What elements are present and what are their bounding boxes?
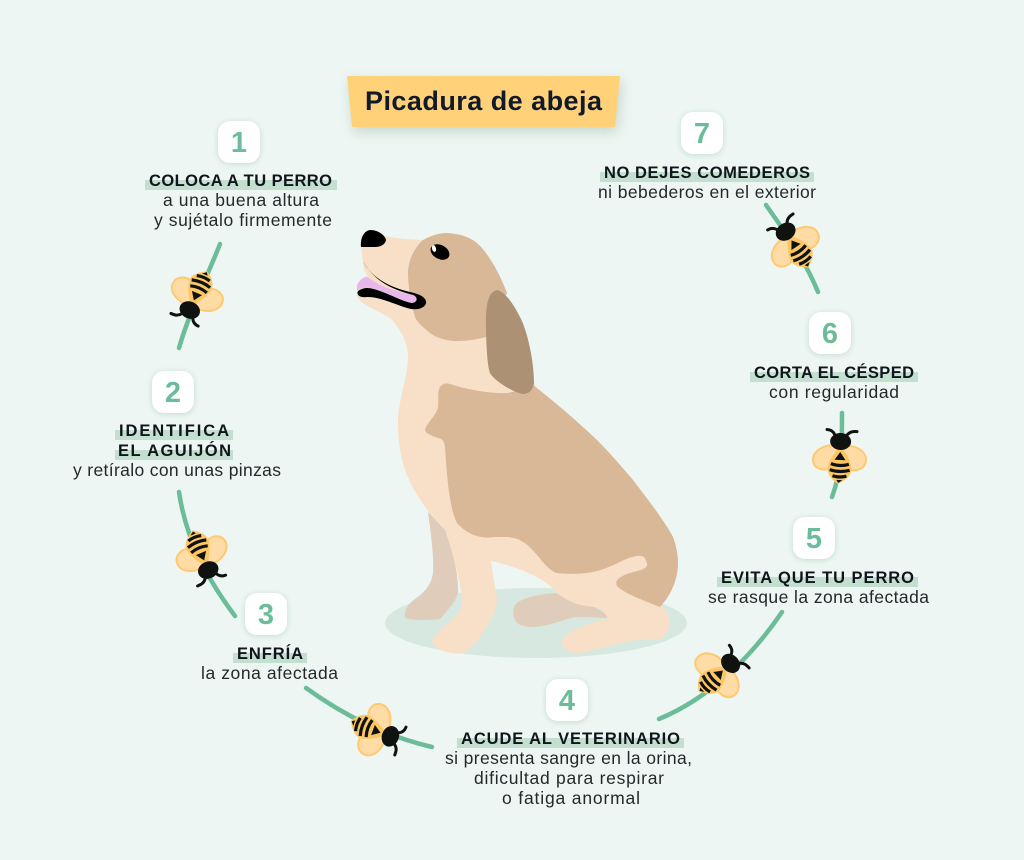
heading 7: NO DEJES COMEDEROS bbox=[604, 164, 810, 182]
heading 4: ACUDE AL VETERINARIO bbox=[461, 730, 680, 748]
ear bbox=[486, 290, 534, 394]
number badge 3: 3 bbox=[258, 599, 274, 631]
heading 5: EVITA QUE TU PERRO bbox=[721, 569, 914, 587]
text 1 bbox=[154, 190, 332, 230]
back patch bbox=[425, 383, 678, 607]
head patch bbox=[408, 233, 507, 341]
mouth bbox=[357, 261, 426, 309]
number badge 6 bbox=[809, 312, 851, 354]
connector with bee 3 bbox=[306, 688, 432, 765]
step 3 bbox=[201, 593, 338, 683]
text 5: se rasque la zona afectada bbox=[708, 587, 929, 607]
illustration: dog bbox=[357, 230, 687, 658]
connector with bee 2 bbox=[168, 492, 238, 616]
number badge 2 bbox=[152, 371, 194, 413]
number badge 7: 7 bbox=[694, 118, 710, 150]
connector with bee 1 bbox=[161, 244, 231, 348]
step 5 bbox=[708, 517, 929, 607]
nose bbox=[361, 230, 386, 247]
heading 6: CORTA EL CÉSPED bbox=[754, 363, 914, 382]
text 1: a una buena altura bbox=[163, 190, 319, 210]
text 4: o fatiga anormal bbox=[502, 788, 640, 808]
text 6: con regularidad bbox=[769, 382, 899, 402]
number badge 1: 1 bbox=[231, 127, 247, 159]
title banner bbox=[347, 76, 620, 127]
text 4: si presenta sangre en la orina, bbox=[445, 748, 692, 768]
number badge 5 bbox=[793, 517, 835, 559]
text 4: dificultad para respirar bbox=[474, 768, 664, 788]
heading 2: IDENTIFICA bbox=[119, 422, 229, 440]
ground shadow bbox=[385, 588, 687, 658]
step 2 bbox=[73, 371, 281, 480]
title banner: Picadura de abeja bbox=[365, 86, 603, 116]
text 2: y retíralo con unas pinzas bbox=[73, 460, 281, 480]
connector with bee 4 bbox=[659, 612, 782, 719]
body bbox=[357, 232, 669, 653]
number badge 1 bbox=[218, 121, 260, 163]
heading 2 bbox=[115, 422, 233, 460]
number badge 4 bbox=[546, 679, 588, 721]
step 7 bbox=[598, 112, 816, 202]
text 1: y sujétalo firmemente bbox=[154, 210, 332, 230]
heading 3: ENFRÍA bbox=[237, 644, 303, 663]
step 6 bbox=[750, 312, 918, 402]
number badge 4: 4 bbox=[559, 685, 575, 717]
number badge 5: 5 bbox=[806, 523, 822, 555]
number badge 6: 6 bbox=[822, 318, 838, 350]
text 7: ni bebederos en el exterior bbox=[598, 182, 816, 202]
connector with bee 6 bbox=[757, 205, 831, 292]
number badge 7 bbox=[681, 112, 723, 154]
step 1 bbox=[145, 121, 337, 230]
far legs bbox=[405, 512, 610, 627]
tongue bbox=[357, 277, 417, 303]
text 4 bbox=[445, 748, 692, 808]
heading 2: EL AGUIJÓN bbox=[118, 441, 231, 460]
step 4 bbox=[445, 679, 692, 808]
text 3: la zona afectada bbox=[201, 663, 338, 683]
connector with bee 5 bbox=[812, 413, 867, 497]
heading 1: COLOCA A TU PERRO bbox=[149, 172, 332, 190]
number badge 2: 2 bbox=[165, 377, 181, 409]
eye bbox=[428, 241, 452, 263]
